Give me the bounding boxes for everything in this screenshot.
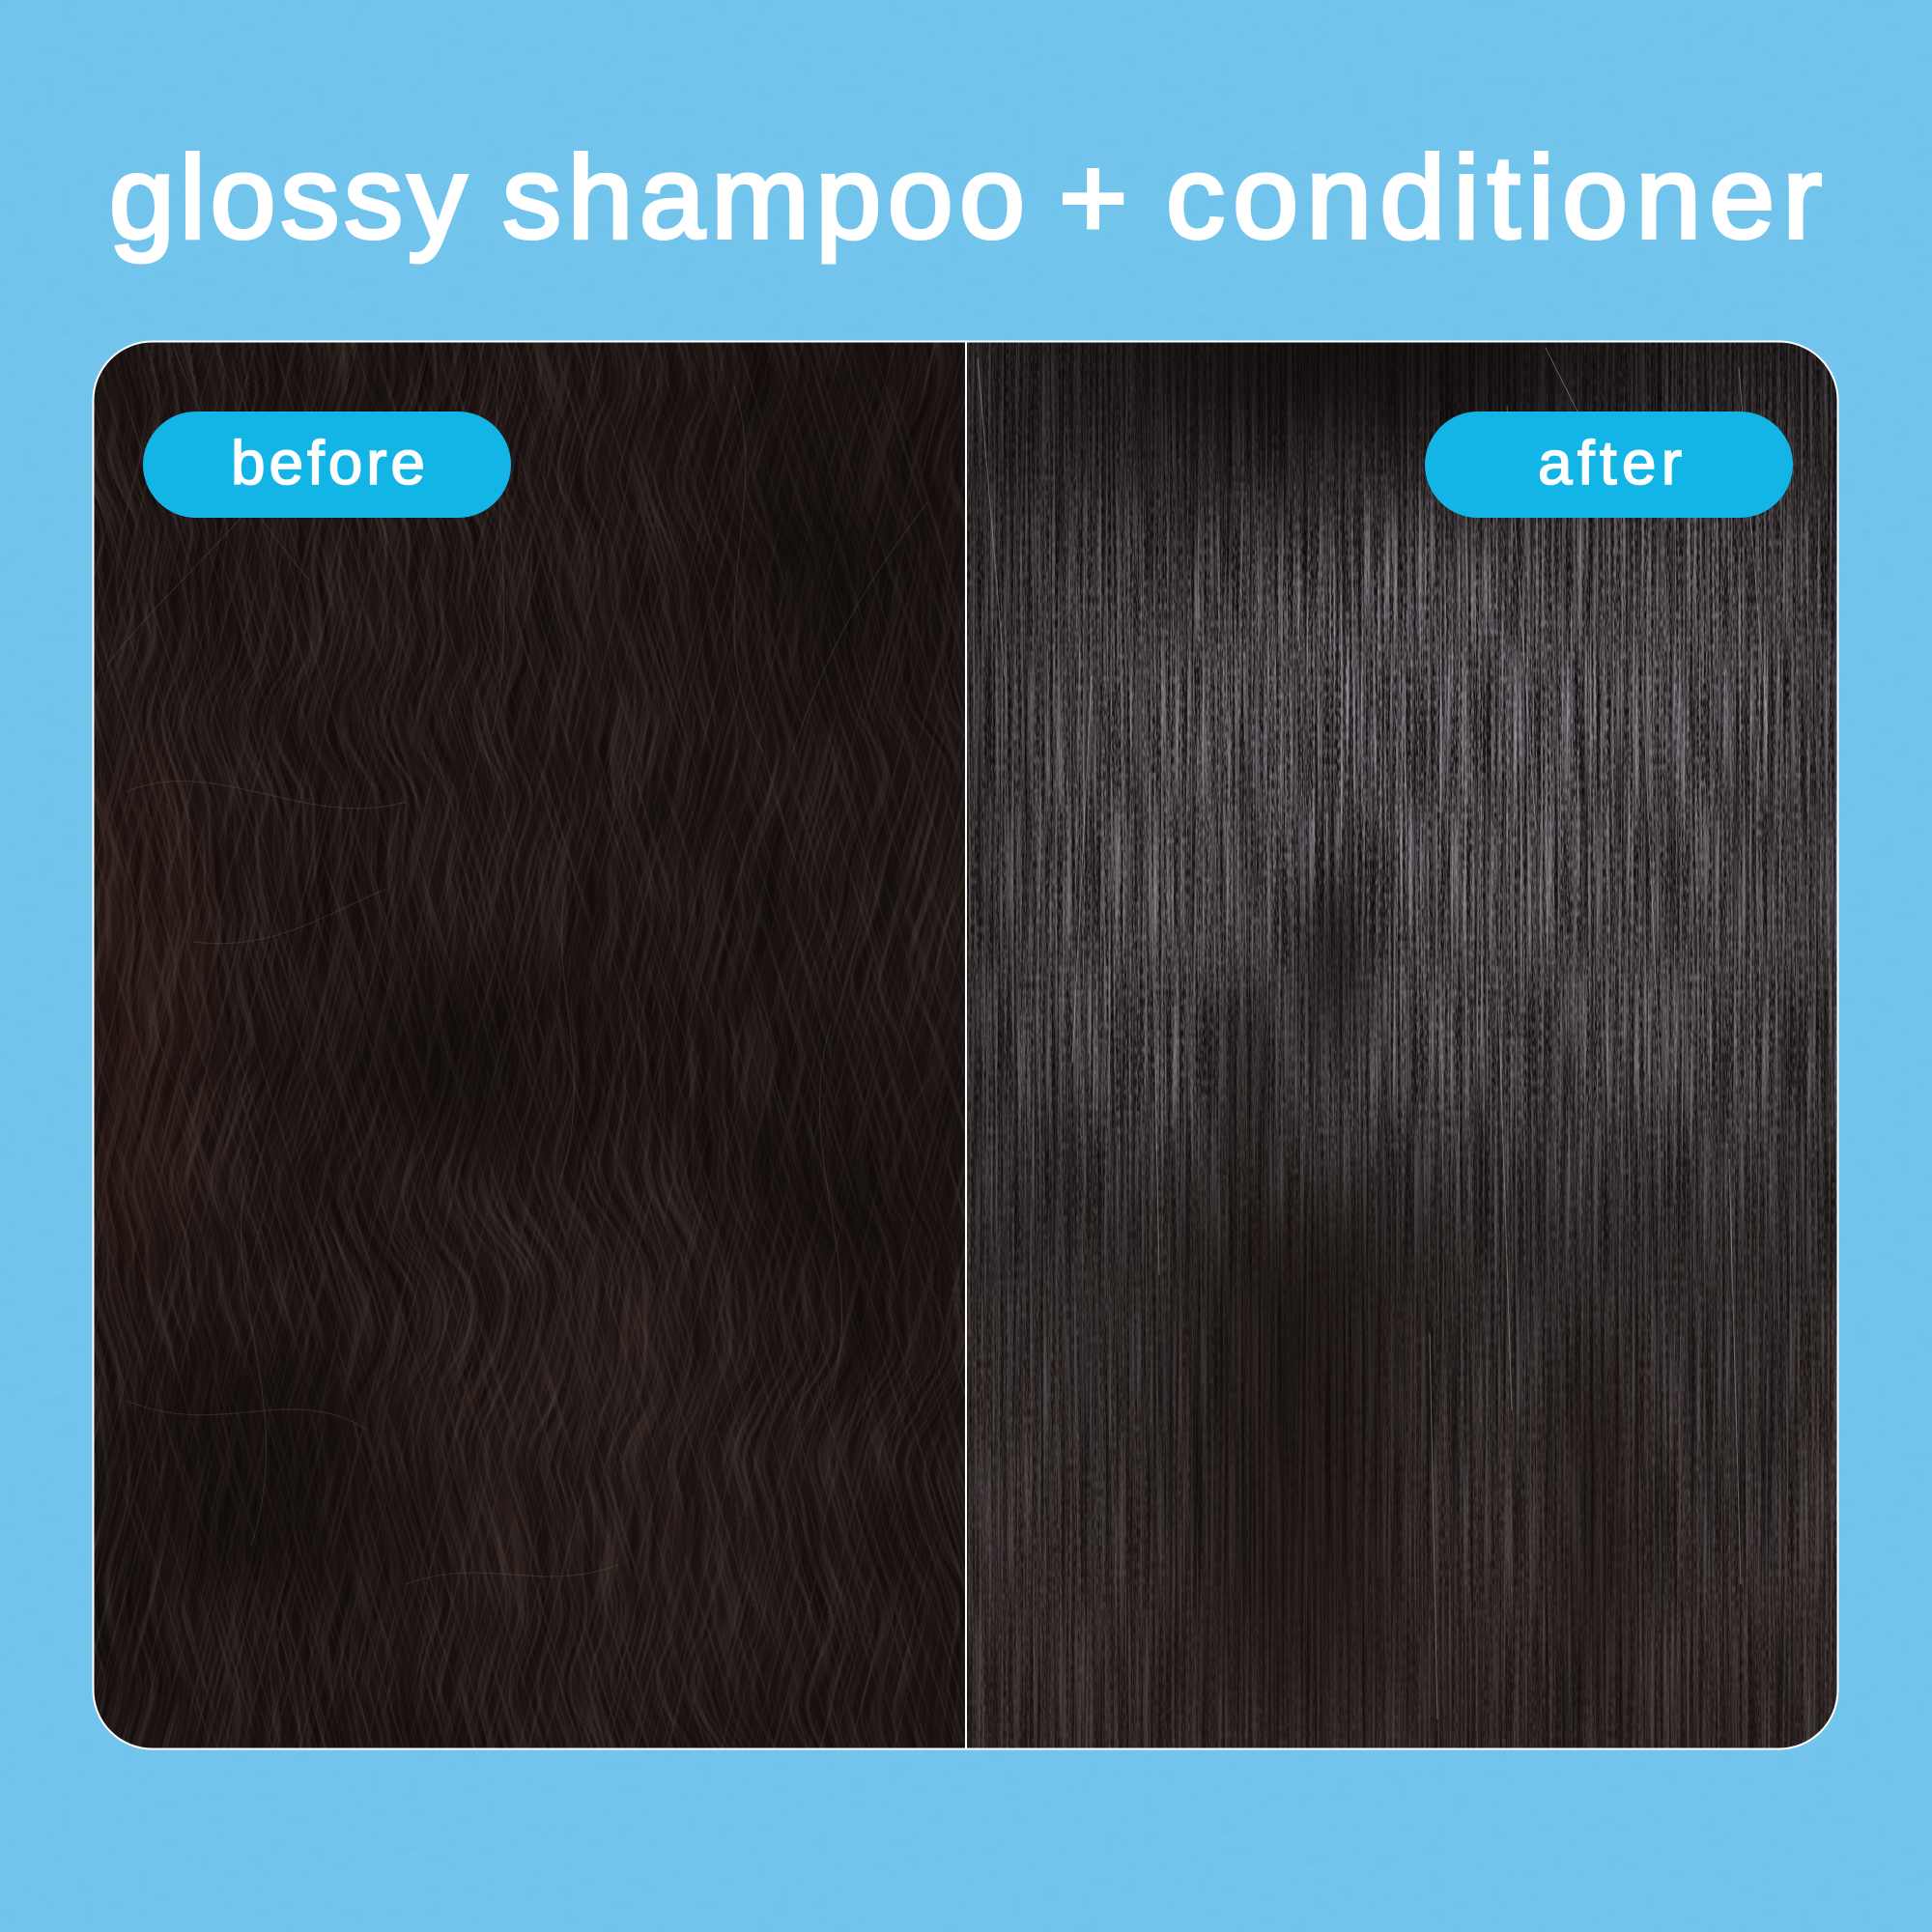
title: conditioner [1166, 131, 1822, 263]
center divider [965, 341, 967, 1749]
panel outline [93, 342, 1837, 1748]
after pill [1425, 412, 1793, 518]
after pill: after [1538, 428, 1682, 497]
before hair wavy strands [95, 342, 965, 1748]
before hair tonal shading [95, 785, 201, 1246]
after hair dark strands [967, 341, 1838, 1749]
before hair crossing strands [95, 342, 965, 1748]
panel: before hair photo [95, 342, 965, 1748]
before hair dark patches [164, 357, 898, 1575]
title: + [1059, 131, 1127, 263]
panel: after hair photo [967, 341, 1838, 1749]
title: shampoo [502, 131, 1025, 263]
infographic canvas [93, 151, 1839, 1750]
after hair glossy shine [967, 341, 1838, 1749]
before pill: before [231, 428, 425, 497]
before pill [143, 412, 511, 518]
after hair bright strands [978, 348, 1768, 1719]
title [109, 131, 1822, 263]
before hair flyaway strands [106, 348, 927, 1584]
title: glossy [109, 131, 467, 263]
